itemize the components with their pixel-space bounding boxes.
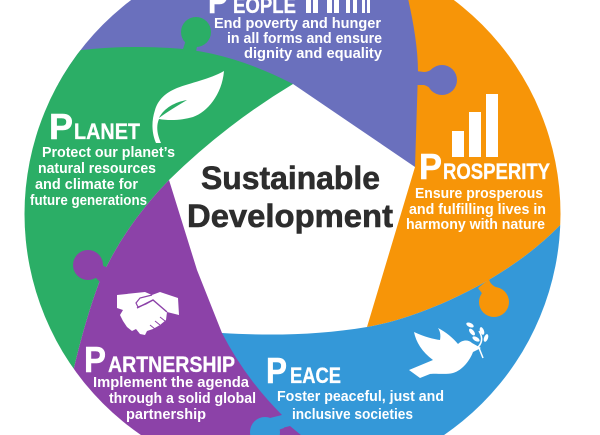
puzzle tab: peace into partnership (250, 415, 284, 435)
people text: End poverty and hunger (214, 15, 381, 32)
partnership text: Implement the agenda (93, 374, 250, 391)
puzzle tab: people into prosperity (416, 65, 457, 95)
planet text: natural resources (38, 160, 156, 177)
peace text: inclusive societies (292, 406, 413, 423)
planet text: future generations (30, 192, 147, 209)
prosperity heading: P (419, 146, 442, 187)
partnership text: through a solid global (109, 390, 256, 407)
icon: dove with branch (409, 321, 489, 378)
planet heading: P (49, 106, 73, 147)
peace heading: P (266, 350, 287, 391)
center title: Sustainable (201, 160, 380, 196)
prosperity text: Ensure prosperous (415, 185, 543, 202)
partnership heading: P (84, 339, 106, 380)
puzzle tab: partnership into planet (73, 250, 108, 282)
prosperity text: harmony with nature (406, 216, 545, 233)
peace heading (266, 350, 341, 391)
puzzle tab: planet into people (181, 17, 211, 52)
segment: partnership (60, 180, 307, 435)
puzzle tab: prosperity into peace (478, 279, 509, 317)
planet heading: LANET (74, 119, 141, 144)
people text (214, 15, 383, 62)
icon: handshake (117, 292, 179, 335)
icon: leaf (152, 71, 224, 143)
partnership heading: ARTNERSHIP (108, 352, 235, 377)
center title: Development (187, 198, 393, 234)
planet text: and climate for (35, 176, 138, 193)
peace heading: EACE (290, 363, 341, 388)
planet text: Protect our planet’s (42, 144, 175, 161)
peace text (277, 388, 444, 423)
planet text (30, 144, 175, 209)
prosperity text: and fulfilling lives in (409, 201, 546, 218)
segment: prosperity (367, 0, 560, 327)
partnership text: partnership (126, 406, 206, 423)
segment: peace (222, 224, 560, 435)
icon: bar chart (452, 94, 498, 157)
icon: people figures (306, 0, 370, 13)
peace text: Foster peaceful, just and (277, 388, 444, 405)
partnership text (93, 374, 256, 423)
partnership heading (84, 339, 235, 380)
people text: dignity and equality (244, 45, 383, 62)
prosperity heading (419, 146, 550, 187)
segment: planet (24, 47, 293, 369)
prosperity heading: ROSPERITY (443, 159, 550, 184)
center title (187, 160, 393, 234)
segment: people (58, 0, 418, 167)
prosperity text (406, 185, 546, 233)
people heading (208, 0, 296, 21)
people text: in all forms and ensure (227, 30, 382, 47)
planet heading (49, 106, 141, 147)
